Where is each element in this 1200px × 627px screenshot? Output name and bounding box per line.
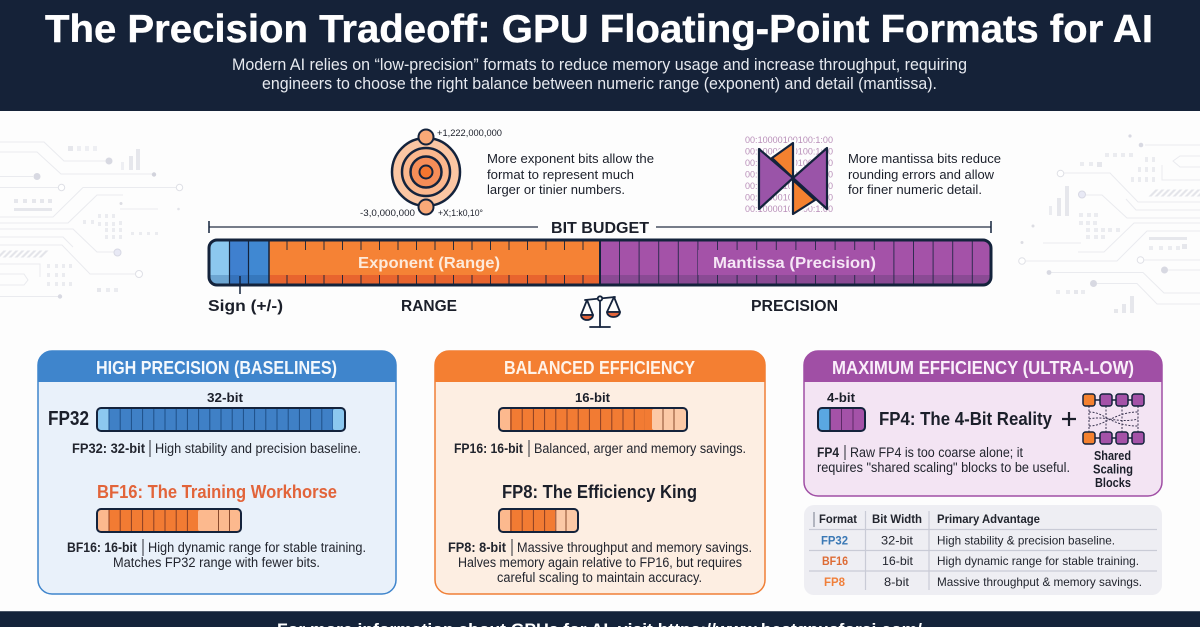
panel: maximum efficiency xyxy=(804,351,1162,496)
table header row: Primary Advantage xyxy=(937,512,1040,526)
FP8 bit bar xyxy=(499,509,578,532)
icon: mantissa binary and bowtie: 00:10000100100:1:00 xyxy=(745,170,833,180)
mantissa explanation text: for finer numeric detail. xyxy=(848,183,982,197)
mantissa explanation text xyxy=(848,152,1001,197)
icon: exponent range rings xyxy=(360,128,502,219)
FP8 description xyxy=(448,539,752,585)
plus sign xyxy=(1062,412,1076,426)
icon: mantissa binary and bowtie: 00:10000100100:1:00 xyxy=(745,192,833,204)
mantissa label: Mantissa (Precision) xyxy=(713,255,876,272)
table row BF16: 16-bit xyxy=(882,554,914,568)
FP32 label: FP32 xyxy=(48,408,89,430)
table header row xyxy=(819,512,1040,526)
sign label: Sign (+/-) xyxy=(208,298,283,315)
shared scaling caption: Scaling xyxy=(1093,462,1133,476)
shared scaling caption xyxy=(1093,449,1133,490)
table row FP8: Massive throughput & memory savings. xyxy=(937,575,1142,589)
table row BF16: BF16 xyxy=(822,554,848,568)
FP32 bit bar xyxy=(97,408,345,431)
FP16 description: Balanced, arger and memory savings. xyxy=(534,441,746,456)
panel header: BALANCED EFFICIENCY xyxy=(504,358,695,378)
FP4 description xyxy=(817,445,1070,475)
FP8 heading: FP8: The Efficiency King xyxy=(502,481,697,502)
panel header xyxy=(38,351,396,382)
FP16 bit bar xyxy=(499,408,687,431)
icon: mantissa binary and bowtie: 00:10000100100:1:00 xyxy=(745,135,833,146)
shared scaling caption: Shared xyxy=(1094,449,1131,463)
footer band xyxy=(0,611,1200,627)
icon: exponent range rings: +X;1:k0,10° xyxy=(438,208,483,218)
table row FP8: 8-bit xyxy=(884,575,910,589)
panel: balanced efficiency xyxy=(435,351,765,594)
mantissa explanation text: rounding errors and allow xyxy=(848,168,995,182)
FP8 description: careful scaling to maintain accuracy. xyxy=(497,570,702,585)
subtitle xyxy=(232,56,967,93)
FP8 description: Massive throughput and memory savings. xyxy=(517,540,752,555)
FP4 description: Raw FP4 is too coarse alone; it xyxy=(850,445,1023,460)
FP32 description xyxy=(72,440,361,457)
table row FP32: 32-bit xyxy=(881,534,914,548)
BF16 bit bar xyxy=(97,509,241,532)
icon: mantissa binary and bowtie: 00:10000100100:1:00 xyxy=(745,181,833,192)
BF16 description: Matches FP32 range with fewer bits. xyxy=(113,555,320,570)
circuit decoration right xyxy=(1019,134,1200,313)
FP8 description: FP8: 8-bit xyxy=(448,540,506,555)
icon: mantissa binary and bowtie: 00:10000100100:1:00 xyxy=(745,204,833,215)
4-bit label: 4-bit xyxy=(827,390,856,405)
icon: exponent range rings: +1,222,000,000 xyxy=(437,128,502,139)
FP4 heading: FP4: The 4-Bit Reality xyxy=(879,408,1053,429)
icon: exponent range rings: -3,0,000,000 xyxy=(360,208,415,219)
icon: shared scaling blocks xyxy=(1083,394,1144,444)
subtitle: engineers to choose the right balance between numeric range (exponent) and detail (mantissa). xyxy=(262,75,937,93)
header band xyxy=(0,0,1200,111)
mantissa explanation text: More mantissa bits reduce xyxy=(848,152,1001,166)
exponent explanation text xyxy=(487,152,654,197)
16-bit label: 16-bit xyxy=(575,390,611,405)
comparison table xyxy=(804,505,1162,595)
32-bit label: 32-bit xyxy=(207,390,244,405)
table header row: Bit Width xyxy=(872,512,922,526)
shared scaling caption: Blocks xyxy=(1095,476,1131,490)
FP32 description: High stability and precision baseline. xyxy=(155,441,361,456)
table row FP32: High stability & precision baseline. xyxy=(937,534,1115,548)
bit budget bracket: BIT BUDGET xyxy=(551,220,649,237)
title: The Precision Tradeoff: GPU Floating-Point Formats for AI xyxy=(45,8,1153,51)
FP32 description: FP32: 32-bit xyxy=(72,441,145,456)
FP16 description xyxy=(454,440,746,457)
table row BF16: High dynamic range for stable training. xyxy=(937,554,1139,568)
sign bits xyxy=(209,240,269,285)
BF16 description: BF16: 16-bit xyxy=(67,540,137,555)
exponent bits xyxy=(269,240,600,285)
bit budget bar xyxy=(209,240,991,285)
table row FP32 xyxy=(821,534,1115,548)
BF16 description xyxy=(67,539,366,570)
icon: balance scale xyxy=(581,296,620,327)
table row FP32: FP32 xyxy=(821,534,848,548)
exponent explanation text: More exponent bits allow the xyxy=(487,152,654,166)
circuit decoration left xyxy=(0,142,183,299)
FP16 description: FP16: 16-bit xyxy=(454,441,523,456)
exponent label: Exponent (Range) xyxy=(358,255,500,272)
FP4 description: FP4 xyxy=(817,445,839,460)
panel header xyxy=(804,351,1162,382)
table row BF16 xyxy=(822,554,1139,568)
FP4 description: requires "shared scaling" blocks to be useful. xyxy=(817,460,1070,475)
range label: RANGE xyxy=(401,298,457,315)
FP4 bit bar xyxy=(818,408,865,431)
subtitle: Modern AI relies on “low-precision” formats to reduce memory usage and increase throughput, requiring xyxy=(232,56,967,74)
precision label: PRECISION xyxy=(751,298,838,315)
sign label xyxy=(208,276,283,315)
panel: high precision xyxy=(38,351,396,594)
FP8 description: Halves memory again relative to FP16, but requires xyxy=(458,555,742,570)
BF16 heading: BF16: The Training Workhorse xyxy=(97,481,337,502)
exponent explanation text: larger or tinier numbers. xyxy=(487,183,625,197)
table row FP8: FP8 xyxy=(824,575,845,589)
icon: mantissa binary and bowtie: 00:10000100100:1:00 xyxy=(745,158,833,169)
panel header: MAXIMUM EFFICIENCY (ULTRA-LOW) xyxy=(832,358,1134,378)
BF16 description: High dynamic range for stable training. xyxy=(148,540,366,555)
exponent explanation text: format to represent much xyxy=(487,168,634,182)
panel header: HIGH PRECISION (BASELINES) xyxy=(96,358,337,378)
table header row: Format xyxy=(819,512,857,526)
icon: mantissa binary and bowtie xyxy=(745,135,833,215)
panel header xyxy=(435,351,765,382)
mantissa bits xyxy=(600,240,991,285)
icon: mantissa binary and bowtie: 00:10000100100:1:00 xyxy=(745,146,833,158)
table row FP8 xyxy=(824,575,1142,589)
